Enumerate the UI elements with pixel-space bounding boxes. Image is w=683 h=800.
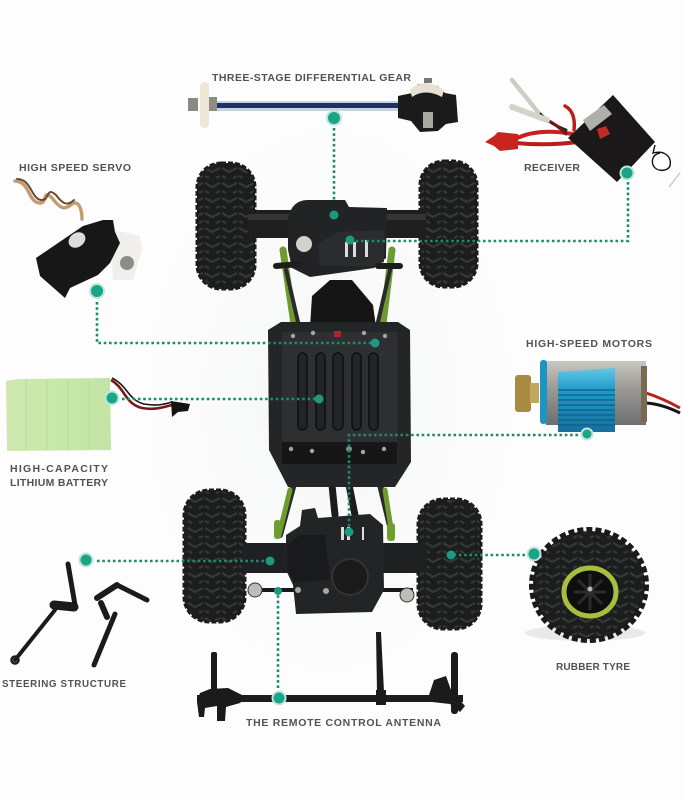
rear gear cover — [287, 535, 330, 582]
label: three-stage differential gear: THREE-STAGE DIFFERENTIAL GEAR — [212, 72, 411, 84]
label: high speed servo: HIGH SPEED SERVO — [19, 162, 131, 174]
rear skid plate slots — [341, 527, 364, 540]
middle joint — [376, 690, 386, 705]
label: rubber tyre: RUBBER TYRE — [556, 662, 630, 673]
lower mounting screws — [282, 442, 397, 464]
connector: rubber tyre — [446, 548, 540, 560]
tyre shadow — [525, 625, 645, 641]
connector: battery — [106, 392, 324, 404]
top right wheel — [420, 161, 477, 287]
left steering rod — [12, 564, 75, 664]
middle post — [376, 632, 384, 692]
top axle link arms — [276, 264, 400, 266]
servo sticker — [66, 229, 88, 251]
servo wires — [15, 179, 82, 219]
front axle highlight — [248, 214, 426, 220]
differential housing — [398, 78, 458, 132]
front differential housing — [288, 200, 387, 277]
left gear — [188, 82, 217, 128]
right post — [451, 652, 458, 714]
connector — [171, 401, 190, 417]
connector: steering structure — [80, 554, 274, 566]
drive shaft — [214, 101, 398, 111]
tie rod screws — [248, 583, 414, 602]
circuit box — [568, 95, 655, 182]
end cap — [641, 366, 647, 422]
label: battery second line: LITHIUM BATTERY — [10, 477, 108, 489]
front axle — [248, 210, 426, 238]
chassis frame — [268, 322, 411, 487]
main bar — [197, 695, 463, 702]
skid plate slots — [345, 240, 368, 257]
heat sink — [583, 105, 612, 131]
blue ring — [540, 360, 547, 424]
battery cover plate — [282, 332, 397, 442]
lower right rod — [94, 614, 115, 665]
silver can — [546, 361, 646, 425]
cover slots — [298, 353, 378, 430]
tyre rim — [564, 568, 616, 616]
component: high speed servo — [15, 179, 142, 298]
car chassis assembly — [184, 161, 481, 629]
center motor block — [310, 280, 376, 327]
label: high-speed motors: HIGH-SPEED MOTORS — [526, 338, 652, 350]
rear differential housing — [286, 508, 384, 614]
cell lines — [26, 380, 89, 450]
battery wires — [111, 378, 172, 409]
red T plug — [485, 132, 518, 151]
wires — [516, 106, 578, 144]
connector: differential gear — [327, 111, 341, 220]
rear green shock mounts — [274, 520, 395, 541]
connector: motors — [344, 428, 592, 536]
battery pack — [6, 378, 111, 451]
label: the remote control antenna: THE REMOTE CONTROL ANTENNA — [246, 717, 441, 729]
bottom left wheel — [184, 490, 245, 622]
label: high-capacity lithium battery: HIGH-CAPACITY — [10, 463, 108, 475]
blue heat sink — [558, 368, 615, 432]
connector: remote control antenna — [272, 587, 286, 704]
component: high-capacity lithium battery — [6, 378, 190, 451]
tyre body — [532, 530, 646, 640]
steering tie rod — [253, 588, 413, 592]
antenna loop — [652, 145, 680, 187]
rear emblem — [332, 559, 368, 595]
component: three-stage differential gear — [188, 78, 458, 132]
front sticker — [296, 236, 312, 252]
motor wires — [646, 393, 680, 413]
front skid plate — [318, 230, 384, 266]
bullet plugs — [512, 80, 547, 120]
rear axle — [242, 543, 427, 573]
left mount — [197, 688, 246, 721]
right mount — [428, 676, 465, 712]
rear shocks — [279, 465, 392, 535]
component: rubber tyre — [525, 530, 646, 641]
component: receiver — [485, 80, 680, 187]
white servo horn — [110, 229, 142, 280]
right steering link — [97, 585, 147, 617]
connector: servo — [90, 284, 380, 348]
label: steering structure: STEERING STRUCTURE — [2, 679, 126, 690]
label: receiver: RECEIVER — [524, 162, 580, 174]
servo body — [36, 220, 120, 298]
left post — [211, 652, 217, 694]
top left wheel — [197, 163, 255, 289]
green front shocks — [283, 250, 392, 324]
component: remote control antenna frame — [197, 632, 465, 721]
red switch — [597, 126, 610, 139]
top mounting screws — [291, 331, 387, 338]
rear housing screws — [295, 587, 329, 594]
component: steering structure — [12, 564, 147, 665]
bottom right wheel — [418, 499, 481, 629]
component: high-speed motors — [515, 360, 680, 432]
connector: receiver — [346, 166, 634, 244]
gold pinion — [515, 375, 539, 412]
